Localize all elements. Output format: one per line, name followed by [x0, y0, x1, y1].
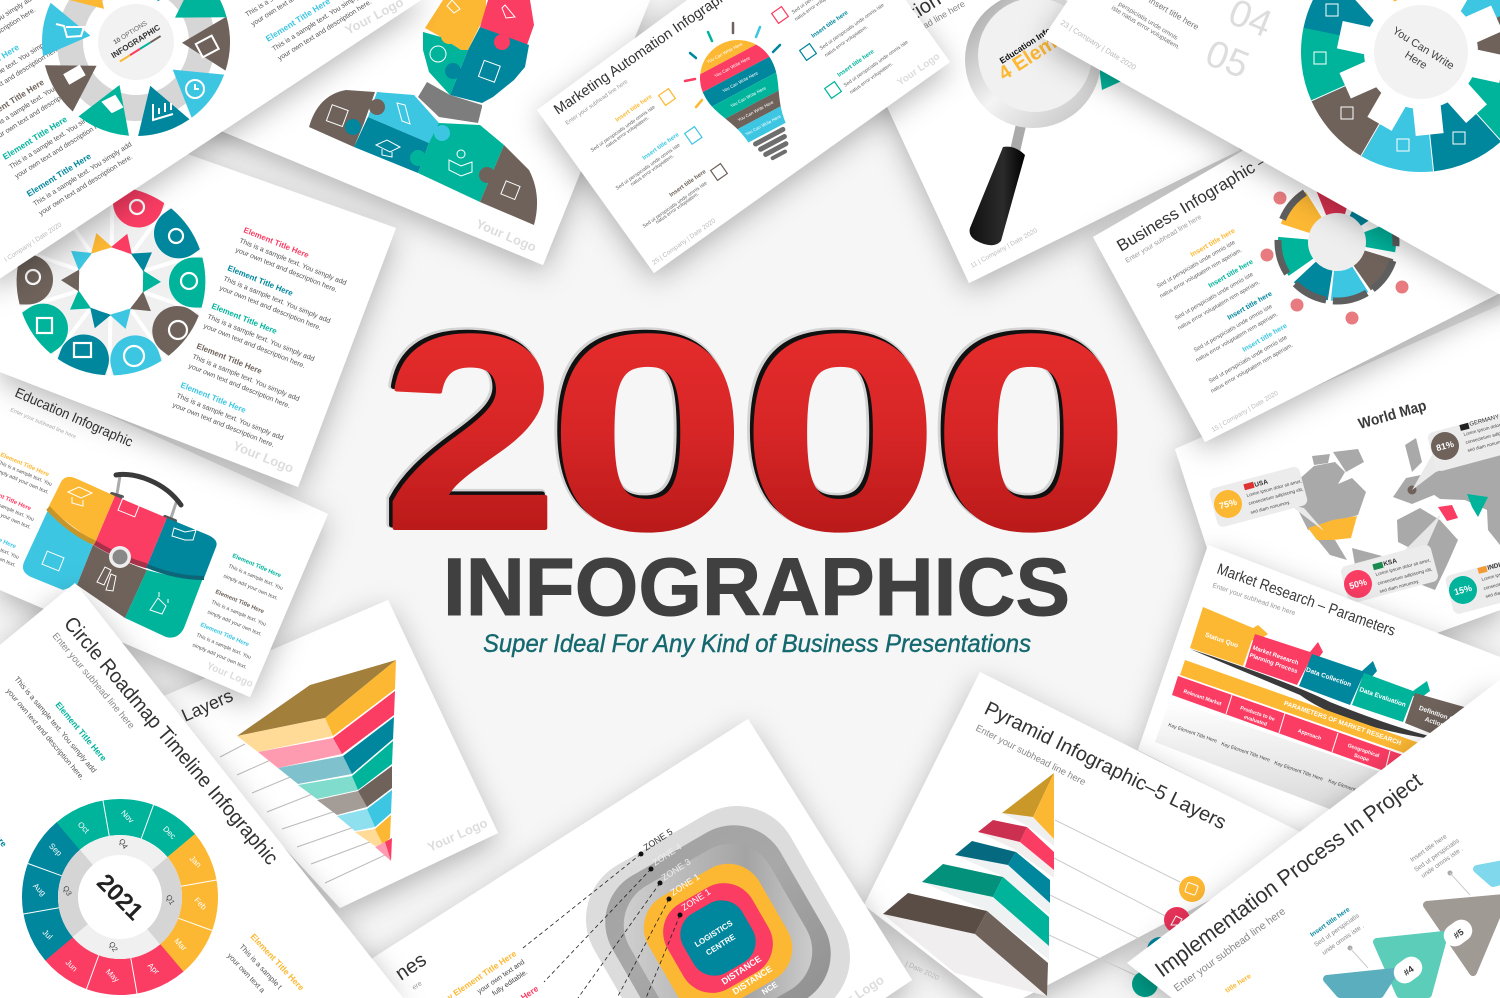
- panel: ten options wheel slide: [0, 0, 421, 285]
- left text blocks: Insert title here: [642, 132, 681, 162]
- panel: marketing automation slide: [537, 0, 950, 273]
- left legend: Element Title Here: [25, 151, 93, 199]
- bulb base: [752, 126, 796, 165]
- heading: implementation: Implementation Process In Project: [1150, 768, 1427, 982]
- wheel legend: This is a sample text. You simply add: [238, 238, 347, 287]
- process steps row: Data Collection: [1305, 667, 1352, 689]
- parameter cells: Scope: [1353, 753, 1370, 763]
- heading: pyramid: Pyramid Infographic–5 Layers: [981, 698, 1230, 834]
- centre label: LOGISTICS: [693, 918, 735, 949]
- wheel legend: your own text and description here.: [171, 402, 275, 449]
- bulb captions: You Can Write Here: [737, 99, 775, 123]
- legend text: your own text and: [476, 959, 526, 996]
- card: USA: consectetuer adipiscing elit,: [1248, 487, 1304, 506]
- logo: Your Logo: [231, 438, 296, 476]
- bulb captions: You Can Write Here: [713, 55, 751, 79]
- card: USA: 75%: [1218, 497, 1238, 511]
- wheel legend: This is a sample text. You simply add: [206, 314, 315, 363]
- month labels: Dec: [161, 824, 178, 841]
- process steps row: Status Quo: [1204, 632, 1239, 650]
- left legend: [0, 452, 53, 569]
- wheel legend: your own text and description here.: [218, 285, 322, 332]
- footer: 15 | Company | Date 2020: [1210, 390, 1280, 434]
- step badges: [1389, 915, 1477, 988]
- month labels: Aug: [31, 881, 48, 898]
- parameter cells: Geographical: [1347, 743, 1381, 759]
- green shape: [1099, 67, 1124, 90]
- process steps row: Market Research: [1252, 645, 1299, 667]
- right legend: simply add your own text.: [191, 642, 247, 671]
- month labels: Sep: [47, 841, 64, 858]
- key element cells: Key Element Title Here: [1273, 760, 1324, 783]
- text blocks: Insert title here: [1226, 291, 1274, 322]
- wheel icons: [26, 200, 197, 366]
- parameters band: PARAMETERS OF MARKET RESEARCH: [1283, 700, 1402, 747]
- footer: | Date 2020: [904, 960, 940, 982]
- card: USA: USA: [1254, 479, 1269, 489]
- puzzle icons: [326, 0, 520, 199]
- panel: education bag slide: [0, 366, 328, 697]
- logo: Your Logo: [425, 815, 490, 855]
- parameter cells: [1172, 676, 1406, 772]
- right legend: Element Title Here: [214, 589, 265, 616]
- title: 2000: 000: [546, 276, 1126, 584]
- inverted 3D pyramid chart: [237, 660, 396, 861]
- right legend: This is a sample text. You: [227, 563, 284, 592]
- legend text: ere: [411, 980, 424, 992]
- quarter labels: Q2: [107, 940, 120, 953]
- wheel centre label: 10 OPTIONS: [112, 20, 149, 46]
- bulb captions: You Can Write Here: [706, 41, 744, 64]
- left legend: I Company I Date 2020: [3, 221, 63, 264]
- text blocks: [1156, 228, 1295, 395]
- map continents: [1296, 438, 1500, 590]
- left text blocks: natus error voluptatem.: [630, 153, 675, 188]
- logo: Your Logo: [895, 51, 942, 88]
- step text: upper: [1409, 833, 1470, 895]
- card: Germany: GERMANY: [1469, 414, 1500, 428]
- highlighted countries: [1308, 486, 1488, 540]
- lens text: 4 Elements: [995, 9, 1095, 85]
- right text blocks: Insert title here: [811, 10, 850, 40]
- card: KSA: [1340, 514, 1441, 604]
- legend text: fully editable.: [491, 969, 529, 998]
- parameter cells: evaluated: [1243, 714, 1268, 728]
- key element cells: Key Element Title Here: [1327, 778, 1378, 801]
- wheel icons: [1314, 4, 1465, 151]
- right legend: your own text and description here.: [277, 0, 373, 62]
- timeline text: perspiciatis unde omnis: [1117, 1, 1179, 42]
- parameter cells: Products to be: [1239, 705, 1276, 723]
- wheel legend: This is a sample text. You simply add: [175, 393, 284, 442]
- wheel legend: your own text and description here.: [187, 363, 291, 410]
- subheading: Enter your subhead line here: [565, 79, 629, 127]
- wheel centre label: INFOGRAPHIC: [110, 23, 162, 60]
- petal wheel: [16, 184, 206, 379]
- zone labels: ZONE 5: [642, 827, 674, 853]
- connector lines: [1049, 820, 1180, 975]
- card: Germany: 81%: [1435, 439, 1455, 453]
- year label: 2021: [91, 869, 148, 926]
- bulb captions: You Can Write Here: [744, 113, 782, 137]
- step badges: #5: [1452, 927, 1466, 941]
- options wheel: [39, 0, 230, 140]
- wheel legend: Element Title Here: [195, 342, 264, 376]
- bulb captions: [706, 41, 782, 137]
- step text: lower: Insert title here: [1309, 906, 1352, 939]
- heading: market research: Market Research – Parameters: [1215, 561, 1398, 640]
- wheel legend: your own text and description here.: [202, 323, 306, 370]
- right legend: This is a sample text. You: [210, 599, 267, 628]
- parameters band: [1180, 660, 1422, 754]
- left legend: your own text and description here.: [14, 117, 110, 180]
- process steps row: Data Evaluation: [1358, 686, 1407, 709]
- wheel legend: Element Title Here: [179, 381, 248, 415]
- left legend: This is a sample text. You simply add: [8, 104, 109, 171]
- step text: lower: [1309, 906, 1368, 968]
- dark swoosh: [1190, 649, 1433, 738]
- panel: person puzzle slide: [150, 0, 650, 265]
- wheel legend: This is a sample text. You simply add: [191, 354, 300, 403]
- title: 2000: 2: [381, 276, 555, 584]
- subheading: Enter your subhead line here: [974, 723, 1087, 788]
- wheel legend: Element Title Here: [210, 302, 279, 336]
- numbered icon circles: [1132, 876, 1205, 997]
- timeline text: 23 | Company | Date 2020: [1059, 18, 1138, 72]
- timeline text: [1059, 0, 1278, 87]
- wheel legend: Element Title Here: [226, 264, 295, 298]
- title: 2000: 2: [384, 279, 558, 587]
- left text blocks: Insert title here: [669, 169, 708, 199]
- text blocks: Insert title here: [1208, 259, 1255, 290]
- icon: magnifying glass: [965, 0, 1101, 245]
- bag icons: [42, 487, 196, 614]
- panel: world map slide: [1175, 305, 1500, 650]
- card: USA: Lorem ipsum dolor sit amet,: [1246, 478, 1302, 498]
- left legend: Element Title Here: [1, 114, 69, 162]
- subheading: Enter your subhead line here: [1211, 582, 1296, 617]
- logo: Your Logo: [474, 216, 539, 255]
- wheel centre label: [105, 15, 165, 64]
- wheel legend: This is a sample text. You simply add: [222, 276, 331, 325]
- subheading: Enter your subhead line here: [1172, 905, 1288, 994]
- quarter labels: Q4: [117, 837, 130, 850]
- legend text: [411, 948, 540, 998]
- parameter cells: Approach: [1297, 728, 1322, 742]
- subtitle: infographics: INFOGRAPHICS: [443, 542, 1070, 633]
- panel: magnifier slide: [815, 0, 1240, 283]
- month labels: Jan: [188, 854, 203, 869]
- wheel centre label: You Can Write: [1390, 25, 1456, 72]
- card: KSA: sed diam nonummy.: [1379, 579, 1420, 594]
- right legend: [191, 553, 284, 671]
- panel: top right wheel slide: [1043, 0, 1500, 300]
- body text: [0, 675, 109, 849]
- right legend: This is a sample text. You: [195, 632, 252, 661]
- right text blocks: Insert title here: [837, 49, 876, 79]
- left text blocks: Insert title here: [615, 94, 654, 124]
- small line icons: [659, 7, 841, 180]
- month labels: Feb: [192, 896, 209, 912]
- zone labels: DISTANCE: [720, 954, 763, 987]
- option icons: [56, 24, 219, 120]
- quarter labels: Q1: [164, 893, 177, 906]
- month labels: Nov: [119, 808, 136, 825]
- text blocks: natus error voluptatem rem aperiam.: [1159, 247, 1244, 300]
- right text blocks: Sed ut perspiciatis unde omnis iste: [843, 39, 910, 89]
- bulb rays: [685, 23, 780, 107]
- body text: This is a sample text. You simply add: [12, 675, 98, 774]
- title: 2000: 000: [549, 279, 1129, 587]
- right legend: Element Title Here: [231, 553, 282, 580]
- card: KSA: KSA: [1383, 558, 1398, 568]
- heading fragment: nes: [391, 949, 431, 985]
- bulb captions: You Can Write Here: [729, 85, 767, 109]
- month labels: Jun: [64, 958, 79, 973]
- process steps row: Planning Process: [1249, 653, 1299, 675]
- text blocks: Insert title here: [1242, 323, 1289, 354]
- left legend: your own text and description here.: [38, 154, 134, 217]
- text blocks: Sed ut perspiciatis unde omnis iste: [1208, 335, 1289, 385]
- left text blocks: natus error voluptatem.: [655, 191, 700, 226]
- zone labels: [642, 827, 780, 997]
- right legend: simply add your own text.: [206, 609, 262, 638]
- light bulb chart: [700, 40, 788, 160]
- gear wheel: [1311, 0, 1500, 171]
- zone rings chart: [586, 806, 850, 998]
- card: USA: [1208, 466, 1324, 531]
- title: 2000: 2: [380, 275, 554, 583]
- briefcase handle: [112, 474, 181, 521]
- lower right text: [226, 932, 307, 995]
- lower right text: This is a sample t: [238, 942, 285, 992]
- briefcase body: [23, 477, 217, 638]
- panel: ten section wheel slide: [0, 150, 396, 487]
- wheel legend: [171, 226, 352, 451]
- heading: world map: World Map: [1356, 397, 1428, 433]
- card: India: [1444, 553, 1500, 615]
- footer: 11 | Company | Date 2020: [970, 227, 1039, 270]
- card: KSA: Lorem ipsum dolor sit amet,: [1375, 557, 1431, 577]
- zone labels: ZONE 1: [680, 887, 712, 913]
- card: KSA: 50%: [1348, 577, 1368, 591]
- left legend: This is a sample text. You simply add: [32, 141, 133, 208]
- right text blocks: natus error voluptatem.: [824, 24, 869, 59]
- left text blocks: [590, 94, 709, 230]
- text blocks: Sed ut perspiciatis unde omnis iste: [1193, 304, 1274, 354]
- zone labels: ZONE 1: [669, 872, 701, 898]
- process steps row: Definition Of: [1418, 705, 1458, 725]
- title: 2000: 000: [545, 275, 1125, 583]
- heading: business: Business Infographic –: [1114, 151, 1271, 255]
- left text blocks: Sed ut perspiciatis unde omnis iste: [590, 104, 657, 154]
- card: Germany: [1412, 408, 1500, 490]
- panel: circle roadmap timeline slide: [0, 583, 403, 998]
- wheel legend: your own text and description here.: [234, 247, 338, 294]
- step text: upper: Insert title here: [1409, 833, 1449, 864]
- text blocks: natus error voluptatem rem aperiam.: [1210, 342, 1295, 395]
- lower right text: your own text a: [226, 951, 267, 995]
- card: USA: sed diam nonummy.: [1250, 500, 1291, 515]
- text blocks: Insert title here: [1190, 228, 1237, 259]
- key element cells: [1155, 700, 1390, 815]
- lens text: Education Infographic: [998, 8, 1079, 66]
- month labels: Oct: [76, 820, 91, 836]
- timeline text: iste natus error voluptatem.: [1110, 5, 1181, 51]
- triangle steps: [1327, 864, 1500, 994]
- centre label: CENTRE: [704, 932, 738, 957]
- segmented wheel: [1256, 161, 1418, 324]
- process steps row: [1190, 607, 1482, 747]
- text blocks: Sed ut perspiciatis unde omnis iste: [1174, 272, 1255, 322]
- month labels: Apr: [146, 961, 161, 976]
- process steps row: Action: [1424, 716, 1445, 729]
- month labels: May: [104, 967, 121, 984]
- month labels: [31, 808, 209, 984]
- text blocks: natus error voluptatem rem aperiam.: [1195, 311, 1280, 364]
- panel: implementation process slide: [1127, 680, 1500, 998]
- left text blocks: natus error voluptatem.: [605, 115, 650, 150]
- person puzzle figure: [309, 0, 537, 225]
- zone labels: NCE: [760, 980, 780, 997]
- right text blocks: Sed ut perspiciatis unde omnis iste: [819, 2, 886, 52]
- dashed leader lines: [523, 854, 680, 998]
- wheel legend: Element Title Here: [242, 226, 311, 260]
- panel: pyramid infographic slide: [864, 672, 1320, 998]
- text blocks: natus error voluptatem rem aperiam.: [1177, 279, 1262, 332]
- inner arrows: [61, 230, 161, 332]
- parameter cells: Relevant Market: [1183, 689, 1222, 707]
- body text: Element Title Here: [53, 700, 109, 763]
- 3D pyramid chart: [883, 773, 1054, 996]
- step badges: #4: [1402, 964, 1416, 978]
- timeline text: 05: [1200, 32, 1255, 87]
- leader dots: [638, 852, 682, 918]
- panel: market research parameters slide: [1138, 545, 1500, 833]
- right text blocks: natus error voluptatem.: [849, 61, 894, 96]
- step text: lower: Sed ut perspiciatis: [1313, 912, 1361, 949]
- heading: layers: Layers: [178, 685, 236, 726]
- heading: circle roadmap: Circle Roadmap Timeline Infographic: [59, 612, 283, 869]
- wheel centre label: Here: [1402, 49, 1429, 72]
- zone labels: DISTANCE: [731, 964, 774, 997]
- panel: business infographic slide: [1093, 135, 1500, 442]
- footer: 25 | Company | Date 2020: [651, 217, 717, 267]
- right legend: Element Title Here: [199, 622, 250, 649]
- panel: logistics zones slide: [310, 719, 912, 998]
- step text: upper: unde omnis iste .: [1420, 846, 1465, 880]
- tagline: Super Ideal For Any Kind of Business Presentations: [483, 630, 1031, 658]
- subheading: Enter your subhead line here: [50, 631, 137, 731]
- left text blocks: Sed ut perspiciatis unde omnis iste: [615, 142, 682, 192]
- month labels: Mar: [172, 937, 189, 953]
- right legend: simply add your own text.: [222, 573, 278, 602]
- step text: left: title here: [1224, 973, 1253, 995]
- right text blocks: [791, 0, 910, 96]
- bulb captions: You Can Write Here: [721, 70, 759, 94]
- card: KSA: consectetuer adipiscing elit,: [1377, 567, 1433, 586]
- panel: layered inverted pyramid slide: [150, 600, 498, 908]
- zone labels: ZONE 3: [660, 857, 692, 883]
- left legend: Element Title Here: [0, 452, 50, 479]
- step text: lower: unde omnis iste .: [1321, 923, 1366, 957]
- left text blocks: Sed ut perspiciatis unde omnis iste: [642, 180, 709, 230]
- subheading: Enter your subhead line here: [9, 407, 77, 440]
- circular timeline wheel: [7, 784, 233, 998]
- month labels: Jul: [41, 928, 54, 942]
- card: India: 15%: [1453, 583, 1473, 597]
- key element cells: Key Element Title Here: [1220, 741, 1271, 764]
- body text: your own text and description here.: [4, 687, 86, 782]
- leader lines: [220, 744, 385, 883]
- left legend: [0, 0, 139, 264]
- lower right text: Element Title Here: [249, 932, 307, 993]
- key element cells: Key Element Title Here: [1167, 722, 1218, 745]
- subheading: Enter your subhead line here: [1124, 214, 1203, 265]
- quarter labels: [61, 837, 177, 953]
- quarter labels: Q3: [61, 884, 74, 897]
- zone labels: ZONE 4: [651, 842, 683, 868]
- heading: education: Education Infographic: [13, 384, 136, 450]
- logo: Your Logo: [205, 661, 254, 690]
- text blocks: Sed ut perspiciatis unde omnis iste: [1156, 240, 1237, 290]
- step text: upper: Sed ut perspiciatis: [1413, 837, 1461, 874]
